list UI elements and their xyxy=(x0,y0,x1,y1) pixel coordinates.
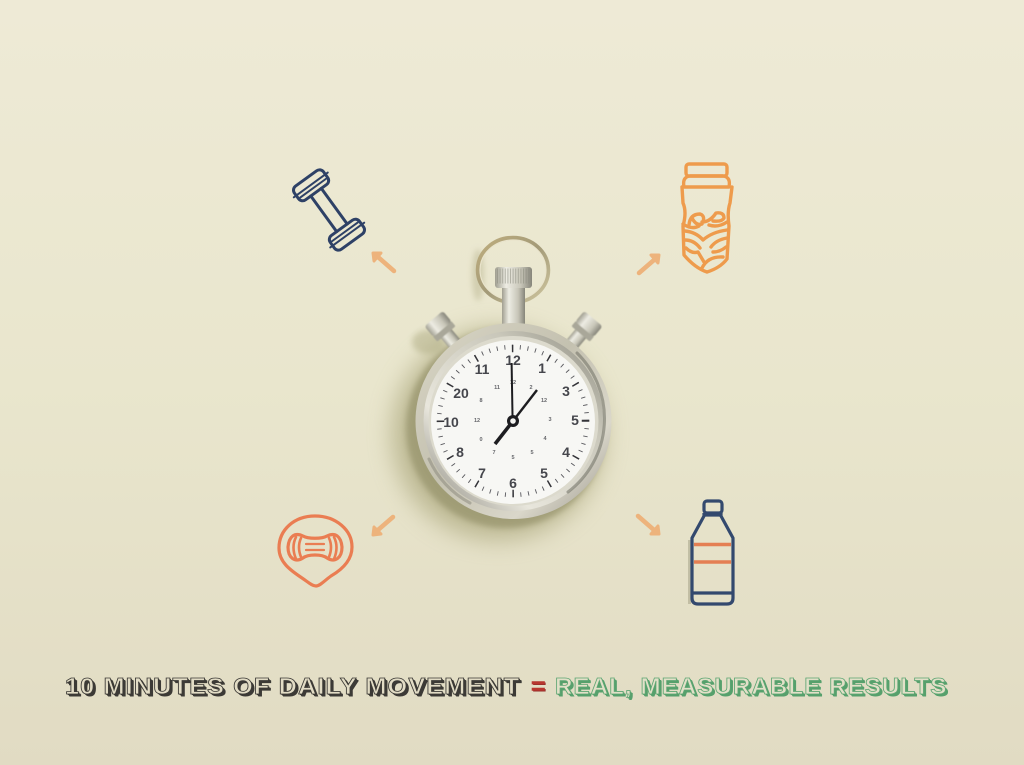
case xyxy=(416,323,612,519)
dial numbers: 5 xyxy=(571,412,579,428)
inner sub-dial numbers: 5 xyxy=(511,455,515,461)
headline: equals sign: = xyxy=(531,673,547,699)
headline: left part: 10 MINUTES OF DAILY MOVEMENT xyxy=(65,673,520,699)
major ticks xyxy=(440,348,586,494)
arrow: to shaker xyxy=(639,255,659,273)
inner sub-dial numbers: 12 xyxy=(474,418,480,424)
bezel xyxy=(424,331,604,511)
inner sub-dial numbers: 11 xyxy=(494,385,500,391)
stem xyxy=(502,286,525,326)
crown xyxy=(495,267,532,288)
right pusher xyxy=(563,311,603,352)
icon: heart pin with dumbbell xyxy=(279,516,352,586)
dial numbers xyxy=(443,352,579,491)
dial numbers: 8 xyxy=(456,444,464,460)
stopwatch shadow xyxy=(392,249,606,540)
dial numbers: 20 xyxy=(453,385,469,401)
icon: water bottle xyxy=(688,501,733,604)
dial numbers: 10 xyxy=(443,414,459,430)
arrow: to heart xyxy=(373,517,393,535)
left pusher xyxy=(424,311,464,352)
arrow: to dumbbell xyxy=(373,253,394,271)
minor ticks xyxy=(439,347,587,495)
dial numbers: 11 xyxy=(475,361,490,377)
dial numbers: 12 xyxy=(505,352,521,368)
stopwatch xyxy=(392,238,612,540)
dial xyxy=(431,340,595,504)
inner sub-dial numbers: 5 xyxy=(530,450,534,456)
bottle stripes xyxy=(694,544,731,562)
dial numbers: 5 xyxy=(540,465,548,481)
icon: protein shaker xyxy=(682,164,732,272)
inner sub-dial numbers: 12 xyxy=(541,398,547,404)
dial numbers: 6 xyxy=(509,475,517,491)
dial numbers: 3 xyxy=(562,383,570,399)
inner sub-dial numbers: 2 xyxy=(529,385,533,391)
bottle outline xyxy=(692,501,733,604)
hands xyxy=(495,363,537,444)
dial numbers: 4 xyxy=(562,444,570,460)
inner sub-dial numbers: 12 xyxy=(510,380,516,386)
inner sub-dial numbers: 7 xyxy=(492,450,496,456)
inner sub-dial numbers: 3 xyxy=(548,417,552,423)
dial numbers: 7 xyxy=(478,465,486,481)
icon: dumbbell xyxy=(289,166,369,254)
headline: right part: REAL, MEASURABLE RESULTS xyxy=(555,673,947,699)
inner sub-dial numbers xyxy=(474,380,552,461)
inner sub-dial numbers: 4 xyxy=(543,436,547,442)
inner sub-dial numbers: 8 xyxy=(479,398,483,404)
bottle shadow xyxy=(688,540,691,604)
inner sub-dial numbers: 0 xyxy=(479,437,483,443)
arrow: to bottle xyxy=(638,516,659,534)
dial numbers: 1 xyxy=(538,360,546,376)
pull ring xyxy=(478,238,548,302)
